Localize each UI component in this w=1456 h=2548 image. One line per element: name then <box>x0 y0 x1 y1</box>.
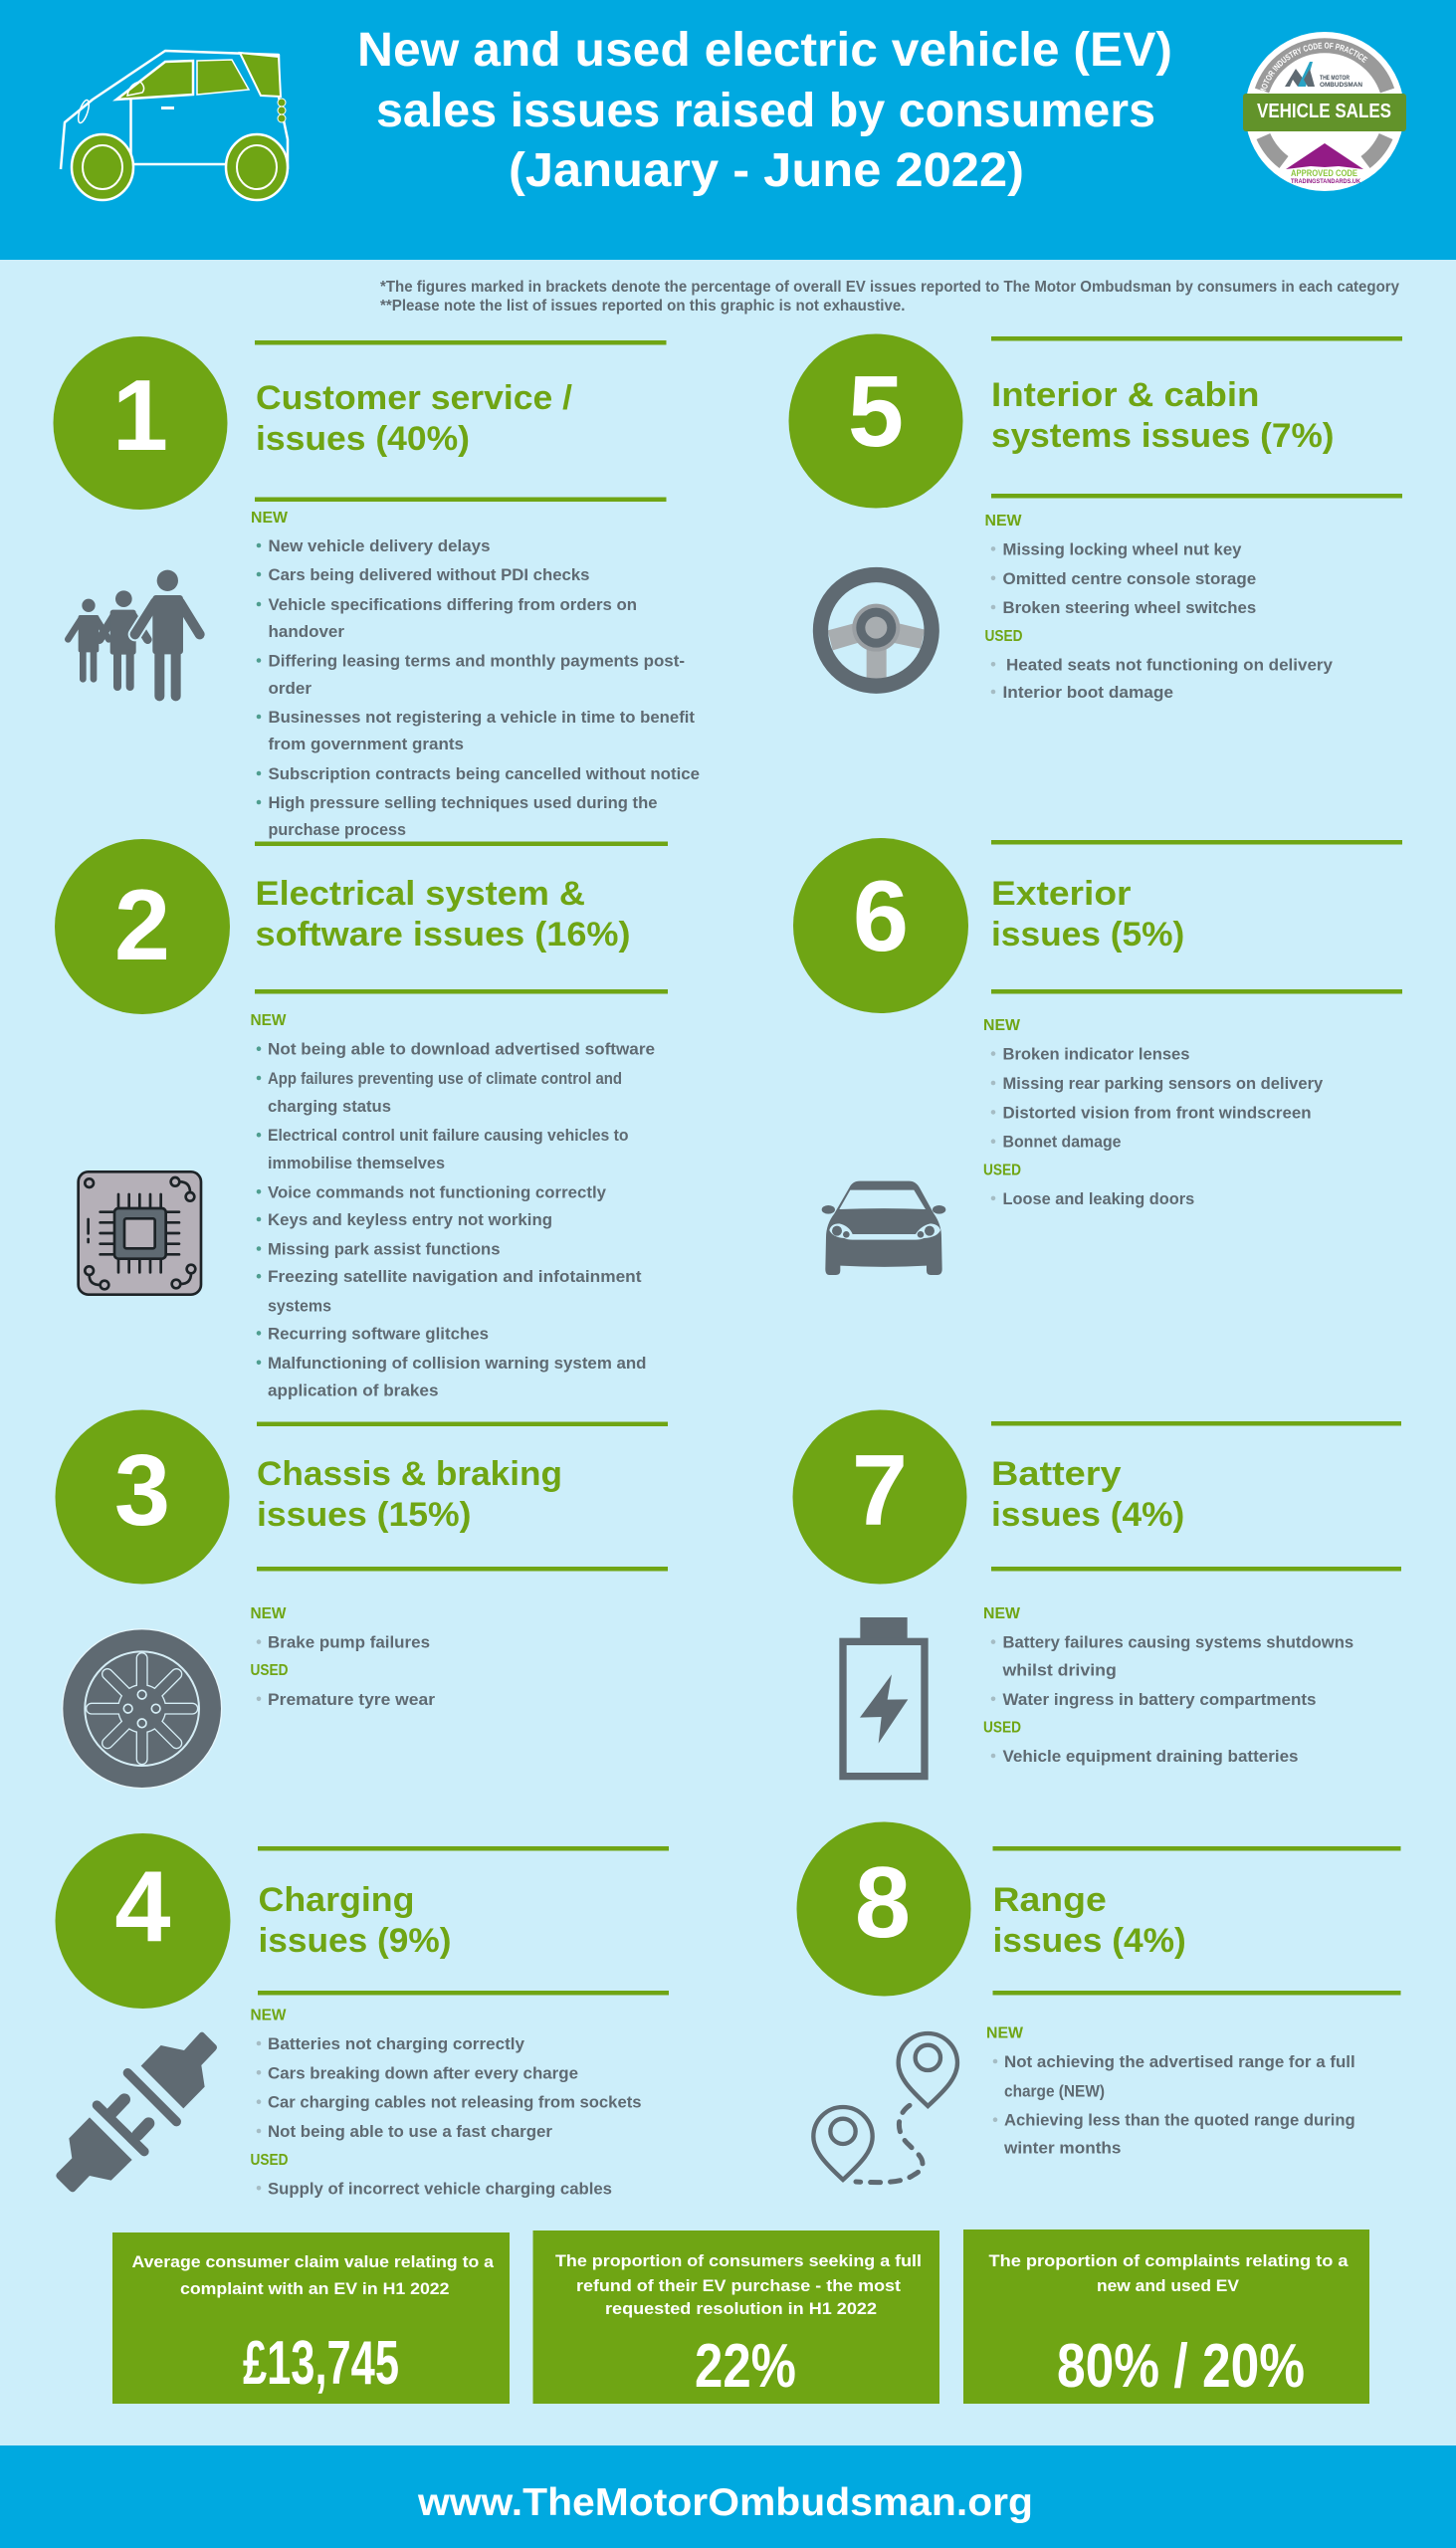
stat: new and used complaint split: 80% / 20% <box>1057 2332 1305 2401</box>
issues list: NEW <box>985 513 1022 530</box>
issues list: App failures preventing use of climate control and <box>268 1070 622 1088</box>
heading: Interior & cabin <box>991 376 1260 414</box>
icon: battery <box>843 1617 925 1777</box>
number circle 3: 3 <box>114 1435 170 1547</box>
issues list <box>251 2007 641 2198</box>
issues list: handover <box>269 623 345 641</box>
issues list: Vehicle equipment draining batteries <box>1003 1748 1298 1766</box>
issues list: immobilise themselves <box>268 1155 445 1172</box>
issues list: Car charging cables not releasing from sockets <box>268 2094 641 2112</box>
issues list: Bonnet damage <box>1003 1134 1121 1152</box>
footer banner <box>0 2445 1456 2548</box>
number circle 2 <box>55 839 230 1014</box>
number circle 6: 6 <box>853 861 909 972</box>
issues list: Businesses not registering a vehicle in time to benefit <box>269 709 696 727</box>
header banner <box>0 0 1456 260</box>
badge: vehicle sales code of practice: THE MOTOR <box>1320 75 1350 82</box>
issues list: Water ingress in battery compartments <box>1003 1691 1316 1709</box>
issues list: Subscription contracts being cancelled without notice <box>269 765 700 783</box>
stat: average claim value <box>112 2232 510 2404</box>
title: New and used electric vehicle (EV) <box>357 24 1172 77</box>
issues list: USED <box>983 1163 1021 1178</box>
heading <box>259 1881 452 1960</box>
badge: vehicle sales code of practice <box>1243 32 1406 191</box>
issues list: Broken steering wheel switches <box>1003 599 1256 617</box>
badge: vehicle sales code of practice: VEHICLE SALES <box>1257 101 1391 122</box>
heading <box>256 379 573 458</box>
issues list <box>251 510 700 839</box>
issues list: Battery failures causing systems shutdowns <box>1003 1634 1353 1652</box>
heading: issues (40%) <box>256 420 470 458</box>
panel: customer service issues <box>54 336 700 839</box>
number circle 8 <box>796 1821 971 1997</box>
heading: issues (9%) <box>259 1922 452 1960</box>
issues list: Interior boot damage <box>1003 684 1173 702</box>
issues list: Vehicle specifications differing from orders on <box>269 596 637 614</box>
issues list: Keys and keyless entry not working <box>268 1211 552 1229</box>
icon: circuit chip <box>79 1171 201 1295</box>
issues list: Premature tyre wear <box>268 1691 436 1709</box>
stat: full refund proportion: The proportion of consumers seeking a full <box>555 2252 922 2270</box>
title: (January - June 2022) <box>509 144 1024 197</box>
issues list <box>983 1017 1324 1208</box>
heading: Range <box>993 1881 1107 1919</box>
number circle 5 <box>788 334 963 508</box>
heading <box>993 1881 1186 1960</box>
panel: exterior issues <box>793 838 1402 1275</box>
issues list: Omitted centre console storage <box>1003 570 1256 588</box>
heading <box>255 875 631 954</box>
issues list <box>983 1605 1353 1766</box>
issues list <box>986 2024 1355 2157</box>
stat: new and used complaint split: new and used EV <box>1097 2277 1239 2295</box>
issues list: whilst driving <box>1001 1661 1117 1679</box>
number circle 3 <box>56 1409 229 1585</box>
heading: Chassis & braking <box>257 1455 562 1493</box>
panel: interior and cabin systems issues <box>788 334 1402 702</box>
issues list: NEW <box>986 2024 1024 2042</box>
issues list: Not achieving the advertised range for a full <box>1004 2053 1355 2071</box>
stat: new and used complaint split: The proportion of complaints relating to a <box>989 2252 1349 2270</box>
heading: issues (15%) <box>257 1496 472 1534</box>
issues list: NEW <box>251 1605 287 1622</box>
icon: alloy wheel <box>63 1629 222 1789</box>
stat: full refund proportion <box>533 2230 939 2404</box>
issues list: application of brakes <box>268 1382 438 1400</box>
panel: battery issues <box>792 1409 1401 1777</box>
heading: issues (5%) <box>991 916 1184 954</box>
issues list: winter months <box>1003 2139 1121 2157</box>
stat: full refund proportion: refund of their EV purchase - the most <box>576 2277 902 2295</box>
issues list: Heated seats not functioning on delivery <box>1006 656 1334 674</box>
number circle 4 <box>56 1833 231 2009</box>
issues list: Distorted vision from front windscreen <box>1003 1104 1312 1122</box>
number circle 1 <box>54 336 227 510</box>
stat: average claim value: complaint with an EV in H1 2022 <box>180 2280 450 2298</box>
panel: range issues <box>796 1821 1401 2183</box>
issues list: NEW <box>251 1012 287 1029</box>
heading: Battery <box>991 1455 1122 1493</box>
number circle 2: 2 <box>114 870 170 981</box>
issues list: charge (NEW) <box>1004 2082 1105 2100</box>
stat: full refund proportion: requested resolution in H1 2022 <box>605 2300 877 2318</box>
issues list: Broken indicator lenses <box>1003 1046 1190 1064</box>
issues list: NEW <box>251 510 289 527</box>
issues list: Cars breaking down after every charge <box>268 2064 578 2082</box>
stat: average claim value: Average consumer claim value relating to a <box>131 2253 495 2271</box>
badge: vehicle sales code of practice: MOTOR INDUSTRY CODE OF PRACTICE <box>1260 42 1367 92</box>
heading <box>991 1455 1184 1534</box>
icon: car front <box>822 1181 945 1275</box>
issues list: Loose and leaking doors <box>1003 1190 1194 1208</box>
number circle 4: 4 <box>114 1851 171 1963</box>
issues list: Brake pump failures <box>268 1634 430 1652</box>
issues list: USED <box>251 1662 289 1679</box>
heading: issues (4%) <box>991 1496 1184 1534</box>
issues list: USED <box>983 1720 1021 1736</box>
panel: electrical system and software issues <box>55 839 668 1400</box>
heading <box>257 1455 562 1534</box>
footnotes <box>380 279 1399 315</box>
icon: plug and socket <box>56 2032 217 2192</box>
badge: vehicle sales code of practice: OMBUDSMAN <box>1320 82 1362 89</box>
heading: Electrical system & <box>255 875 585 913</box>
issues list: Recurring software glitches <box>268 1325 489 1343</box>
issues list: Freezing satellite navigation and infotainment <box>268 1268 642 1286</box>
issues list: order <box>269 680 312 698</box>
heading: systems issues (7%) <box>991 417 1334 455</box>
icon: electric car <box>61 51 288 200</box>
badge: vehicle sales code of practice: APPROVED CODE <box>1291 168 1357 179</box>
issues list <box>251 1012 655 1400</box>
icon: family of people <box>68 570 200 696</box>
panel: charging issues <box>56 1833 669 2198</box>
badge: vehicle sales code of practice: TRADINGSTANDARDS.UK <box>1291 178 1360 185</box>
panel: chassis and braking issues <box>56 1409 668 1789</box>
issues list <box>985 513 1334 702</box>
issues list: systems <box>268 1298 331 1316</box>
stat: full refund proportion: 22% <box>695 2332 796 2401</box>
issues list: from government grants <box>269 736 464 753</box>
issues list: Missing park assist functions <box>268 1240 500 1258</box>
stat: average claim value: £13,745 <box>243 2329 399 2398</box>
issues list: charging status <box>268 1098 391 1116</box>
issues list: Malfunctioning of collision warning system and <box>268 1355 647 1373</box>
issues list: Supply of incorrect vehicle charging cables <box>268 2180 612 2198</box>
issues list: Differing leasing terms and monthly payments post- <box>269 653 685 671</box>
issues list: NEW <box>983 1605 1021 1622</box>
issues list: Missing locking wheel nut key <box>1003 540 1242 558</box>
issues list: USED <box>985 628 1023 645</box>
issues list: Batteries not charging correctly <box>268 2035 525 2053</box>
issues list: NEW <box>251 2007 287 2024</box>
number circle 5: 5 <box>848 356 904 468</box>
title: sales issues raised by consumers <box>376 85 1155 137</box>
number circle 1: 1 <box>112 360 168 472</box>
issues list: Missing rear parking sensors on delivery <box>1003 1075 1324 1093</box>
number circle 6 <box>793 838 968 1013</box>
issues list: Cars being delivered without PDI checks <box>269 566 589 584</box>
issues list: High pressure selling techniques used during the <box>269 794 657 812</box>
issues list: Not being able to download advertised software <box>268 1041 655 1059</box>
issues list: NEW <box>983 1017 1021 1034</box>
number circle 7: 7 <box>852 1435 908 1547</box>
heading: Exterior <box>991 875 1131 913</box>
heading <box>991 875 1184 954</box>
icon: route between map pins <box>813 2033 957 2183</box>
title <box>357 24 1172 197</box>
issues list: New vehicle delivery delays <box>269 537 490 555</box>
issues list: Electrical control unit failure causing vehicles to <box>268 1127 629 1145</box>
footer banner: www.TheMotorOmbudsman.org <box>417 2481 1033 2524</box>
issues list: purchase process <box>269 821 406 839</box>
heading: Charging <box>259 1881 414 1919</box>
issues list: Not being able to use a fast charger <box>268 2123 553 2141</box>
heading <box>991 376 1334 455</box>
stat: new and used complaint split <box>963 2230 1369 2404</box>
heading: software issues (16%) <box>255 916 631 954</box>
issues list: Voice commands not functioning correctly <box>268 1183 607 1201</box>
number circle 8: 8 <box>855 1847 911 1959</box>
heading: Customer service / <box>256 379 573 417</box>
icon: steering wheel <box>820 574 932 686</box>
footnotes: **Please note the list of issues reported on this graphic is not exhaustive. <box>380 298 906 315</box>
footnotes: *The figures marked in brackets denote the percentage of overall EV issues reported to The Motor Ombudsman by consumers in each category <box>380 279 1399 296</box>
issues list: USED <box>251 2152 289 2169</box>
heading: issues (4%) <box>993 1922 1186 1960</box>
issues list: Achieving less than the quoted range during <box>1004 2112 1355 2130</box>
issues list <box>251 1605 436 1709</box>
number circle 7 <box>792 1409 967 1585</box>
